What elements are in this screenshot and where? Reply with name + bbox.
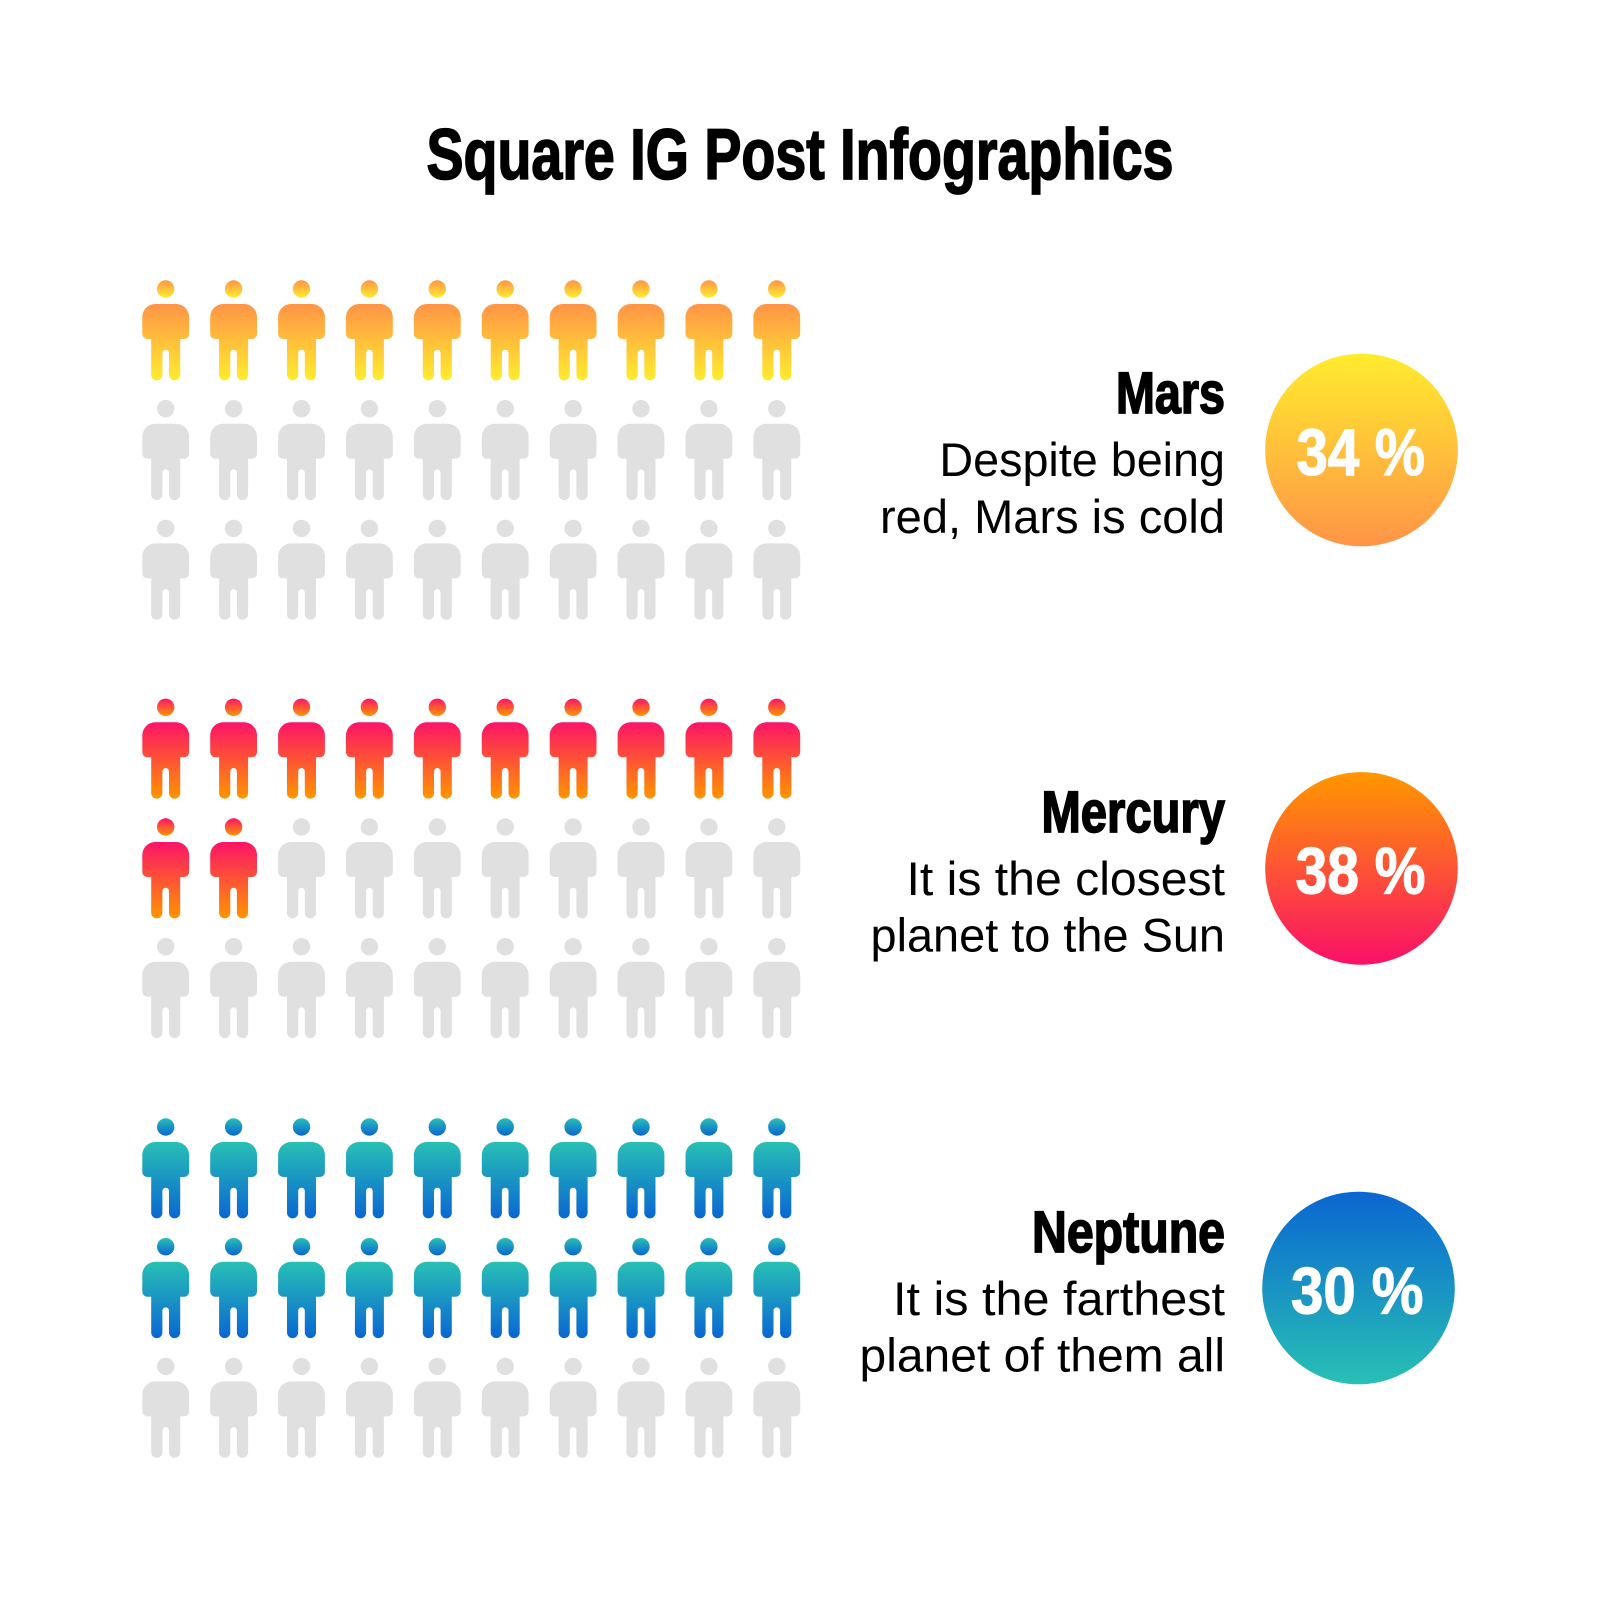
value: 34 %: 34 % <box>1296 415 1425 489</box>
description: Mars line 2: red, Mars is cold <box>880 490 1225 543</box>
badge: Mars 34% <box>1265 354 1458 546</box>
badge: Neptune 30% <box>1262 1192 1455 1384</box>
pictogram: Mars <box>142 280 800 620</box>
heading: Mars: Mars <box>1116 361 1225 426</box>
text block: Neptune <box>860 1200 1225 1382</box>
description: Neptune line 1: It is the farthest <box>893 1272 1225 1325</box>
row: Neptune gray <box>142 1358 800 1458</box>
description: Mars line 1: Despite being <box>939 433 1225 486</box>
row: Neptune highlighted <box>142 1118 800 1218</box>
heading: Neptune: Neptune <box>1032 1200 1225 1265</box>
row: Mars gray lower <box>142 520 800 620</box>
text block: Mercury <box>870 780 1225 962</box>
title: Square IG Post Infographics <box>426 116 1174 195</box>
description: Neptune line 2: planet of them all <box>860 1328 1225 1382</box>
row: Mars highlighted <box>142 280 800 380</box>
value: 30 %: 30 % <box>1291 1254 1424 1328</box>
row: Mars gray <box>142 400 800 500</box>
text block: Mars <box>880 361 1225 543</box>
pictogram: Neptune <box>142 1118 800 1458</box>
row: Mercury gray <box>142 938 800 1038</box>
badge: Mercury 38% <box>1265 772 1458 965</box>
value: 38 %: 38 % <box>1296 834 1426 908</box>
heading: Mercury: Mercury <box>1042 780 1225 845</box>
description: Mercury line 2: planet to the Sun <box>870 908 1225 962</box>
row: Neptune highlighted second <box>142 1238 800 1338</box>
row: Mercury highlighted <box>142 699 800 799</box>
row: Mercury two highlighted, rest gray <box>142 818 800 918</box>
pictogram: Mercury <box>142 699 800 1038</box>
description: Mercury line 1: It is the closest <box>906 852 1225 905</box>
